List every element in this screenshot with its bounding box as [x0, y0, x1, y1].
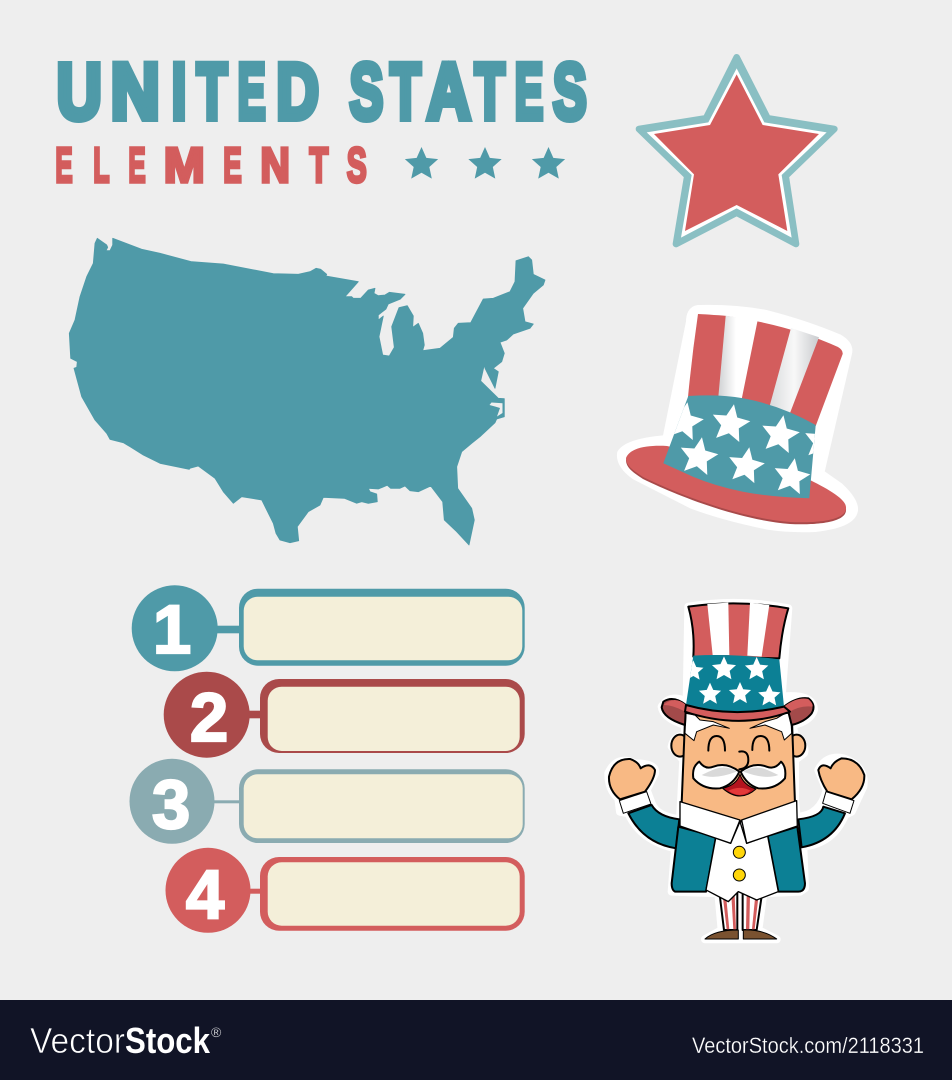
cuffs — [619, 792, 854, 813]
numbered list — [130, 585, 525, 933]
mouth — [723, 774, 756, 796]
title: united states: D — [276, 46, 319, 136]
tongue — [728, 788, 751, 795]
footer id: VectorStock.com/2118331 — [692, 1033, 924, 1058]
hat crown — [688, 314, 843, 426]
item 2: 2 — [190, 679, 228, 756]
hat white stripes — [718, 316, 758, 399]
title: united states: E — [238, 46, 266, 136]
hat brim — [662, 698, 814, 725]
subtitle: elements: T — [309, 139, 328, 193]
title: united states: N — [111, 46, 160, 136]
top hat sticker — [623, 311, 852, 526]
footer bar — [0, 1000, 952, 1080]
title: united states: S — [553, 46, 587, 136]
item 3: 3 — [152, 766, 190, 843]
title: united states: S — [350, 46, 383, 136]
item 4: 4 — [186, 856, 224, 933]
subtitle: elements: E — [223, 139, 242, 193]
hat star band — [663, 395, 816, 498]
hat white stripes — [707, 603, 769, 657]
ears — [671, 735, 805, 757]
footer logo: ® — [211, 1024, 222, 1040]
moustache shading — [702, 767, 778, 777]
footer logo — [30, 1020, 222, 1061]
title: united states: E — [515, 46, 543, 136]
title: united states — [57, 46, 587, 136]
hat brim — [626, 448, 846, 524]
item 1 — [132, 585, 525, 671]
sticker outline — [608, 603, 864, 939]
title: united states: U — [57, 46, 102, 136]
hat crown — [688, 603, 788, 658]
collar — [680, 801, 797, 843]
uncle sam character — [608, 603, 864, 939]
hat stars — [683, 656, 780, 705]
mittens — [609, 758, 864, 799]
nose — [739, 751, 748, 769]
title: united states: I — [172, 46, 186, 136]
subtitle: elements: L — [93, 139, 110, 193]
item 3 — [130, 759, 525, 844]
hat stars — [674, 402, 815, 494]
title: united states: A — [427, 46, 471, 136]
subtitle: elements: E — [55, 139, 73, 193]
title: united states: T — [390, 46, 421, 136]
buttons — [733, 846, 745, 881]
title: united states: T — [197, 46, 227, 136]
footer logo: Stock — [125, 1020, 211, 1061]
title: united states: T — [475, 46, 505, 136]
hat white outline — [623, 311, 852, 526]
hat star band — [686, 655, 784, 712]
subtitle: elements: S — [347, 139, 367, 193]
legs — [719, 892, 762, 930]
large star — [639, 57, 834, 244]
item 2 — [164, 672, 525, 758]
footer logo: Vector — [30, 1020, 125, 1061]
leg stripes — [723, 895, 759, 929]
subtitle: elements — [55, 139, 367, 193]
item 1: 1 — [153, 591, 191, 668]
subtitle: elements: M — [164, 139, 205, 193]
arms — [628, 805, 845, 848]
coat — [672, 827, 805, 892]
shirt — [706, 822, 778, 902]
three small stars — [405, 147, 565, 179]
hair — [685, 713, 792, 741]
shoes — [705, 930, 777, 939]
subtitle: elements: N — [260, 139, 290, 193]
subtitle: elements: E — [128, 139, 146, 193]
face — [682, 712, 795, 822]
moustache — [693, 762, 785, 789]
usa map — [69, 238, 545, 545]
item 4 — [166, 848, 525, 933]
eyes — [708, 736, 769, 769]
